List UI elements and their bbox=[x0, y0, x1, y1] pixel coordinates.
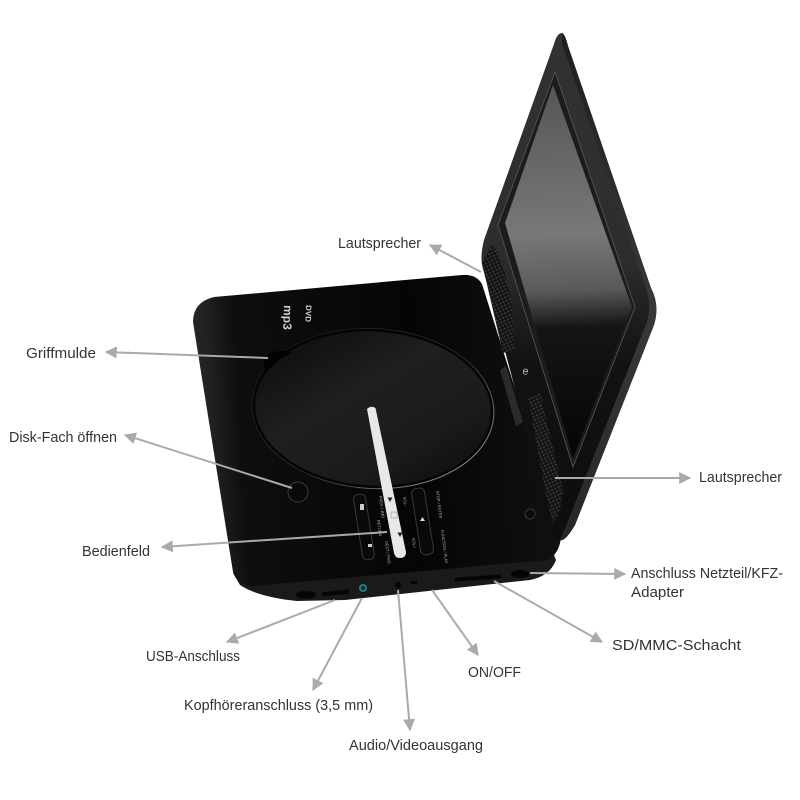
right button group: VOL- bbox=[402, 497, 408, 507]
rear screw bbox=[525, 509, 535, 519]
right button group bbox=[402, 487, 449, 564]
brand logo: e bbox=[521, 365, 530, 378]
label: ON/OFF: ON/OFF bbox=[468, 665, 521, 681]
label: Bedienfeld bbox=[82, 532, 387, 560]
screen bbox=[505, 85, 632, 458]
label: Audio/Videoausgang: Audio/Videoausgang bbox=[349, 738, 483, 754]
arrow: Audio/Video bbox=[398, 590, 410, 730]
label: Disk-Fach öffnen bbox=[9, 430, 292, 488]
label: ON/OFF bbox=[432, 590, 521, 681]
logos bbox=[280, 305, 313, 330]
DVD player device bbox=[193, 33, 656, 601]
left button group: NEXT / FWD bbox=[384, 541, 392, 564]
label: Anschluss Netzteil: Adapter bbox=[631, 585, 684, 601]
lid rim bbox=[560, 33, 656, 540]
left button group: PREV / JMD bbox=[378, 496, 386, 519]
base side edge bbox=[233, 545, 556, 601]
label: Anschluss Netzteil: Anschluss Netzteil/KFZ- bbox=[631, 566, 783, 582]
speaker top bbox=[482, 243, 515, 353]
label: Disk-Fach öffnen: Disk-Fach öffnen bbox=[9, 430, 117, 446]
label: Kopfhöreranschluss bbox=[184, 598, 373, 714]
label: Kopfhöreranschluss: Kopfhöreranschluss (3,5 mm) bbox=[184, 698, 373, 714]
arrow: USB bbox=[227, 600, 335, 642]
label: Lautsprecher right: Lautsprecher bbox=[699, 470, 782, 486]
base top surface bbox=[193, 275, 561, 586]
right button group: STOP / ENTER bbox=[435, 491, 443, 519]
label: Anschluss Netzteil bbox=[530, 566, 783, 601]
label: Bedienfeld: Bedienfeld bbox=[82, 544, 150, 560]
label: Audio/Videoausgang bbox=[349, 590, 483, 754]
left button group: RETURN bbox=[376, 520, 383, 537]
hinge bar bbox=[500, 366, 523, 426]
arrow: Lautsprecher right bbox=[555, 477, 690, 479]
side ports bbox=[296, 570, 529, 599]
label: USB-Anschluss bbox=[146, 600, 335, 665]
screen bezel line bbox=[498, 72, 635, 467]
arrow: Kopfhörer bbox=[313, 598, 362, 690]
label: Lautsprecher top: Lautsprecher bbox=[338, 236, 421, 252]
open button bbox=[288, 482, 308, 502]
label: SD/MMC-Schacht: SD/MMC-Schacht bbox=[612, 638, 741, 654]
finger recess bbox=[264, 351, 292, 373]
white control strip bbox=[367, 407, 406, 558]
arrow: Disk-Fach bbox=[125, 435, 292, 488]
left button group bbox=[353, 493, 392, 564]
strip buttons bbox=[388, 498, 402, 537]
label: Griffmulde bbox=[26, 346, 268, 362]
logos: mp3 bbox=[280, 305, 295, 330]
arrow: Anschluss Netzteil bbox=[530, 573, 625, 574]
arrow: Griffmulde bbox=[106, 352, 268, 358]
arrow: Lautsprecher top bbox=[430, 245, 481, 272]
arrow: ON/OFF bbox=[432, 590, 478, 655]
right button group: VOL+ bbox=[411, 538, 417, 549]
label: Lautsprecher top bbox=[338, 236, 481, 272]
logos: DVD bbox=[303, 305, 313, 322]
screen lid outer bbox=[482, 33, 656, 540]
label: USB-Anschluss: USB-Anschluss bbox=[146, 649, 240, 665]
right button group: FUNCTION / PLAY bbox=[440, 530, 449, 564]
label: SD/MMC-Schacht bbox=[494, 581, 741, 654]
arrow: SD/MMC bbox=[494, 581, 602, 642]
disc compartment lid bbox=[248, 322, 498, 495]
arrow: Bedienfeld bbox=[162, 532, 387, 547]
speaker bottom bbox=[528, 393, 563, 525]
label: Griffmulde: Griffmulde bbox=[26, 346, 96, 362]
